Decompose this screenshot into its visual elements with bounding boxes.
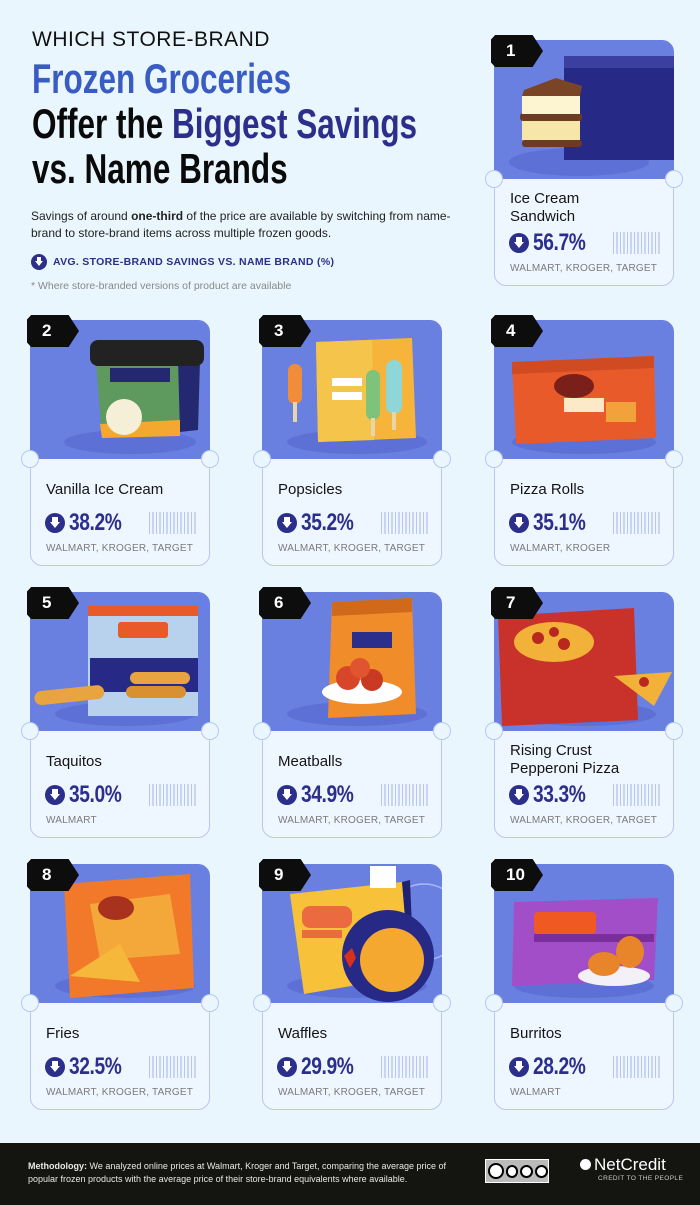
card 10: burritos: Burritos bbox=[510, 1025, 562, 1042]
title: kicker: WHICH STORE-BRAND bbox=[32, 28, 270, 51]
card 9: waffles: 29.9% bbox=[301, 1053, 353, 1080]
card 5: taquitos bbox=[30, 592, 210, 838]
card 9: waffles: WALMART, KROGER, TARGET bbox=[278, 1087, 425, 1098]
methodology text: Methodology: We analyzed online prices at Walmart, Kroger and Target, comparing the average price of popular frozen products with the average price of their store-brand equivalents where available. bbox=[28, 1161, 446, 1184]
card 2: vanilla ice cream: Vanilla Ice Cream bbox=[46, 481, 163, 498]
card 9: waffles: Waffles bbox=[278, 1025, 327, 1042]
card 8: fries: 32.5% bbox=[69, 1053, 121, 1080]
card 9: waffles bbox=[262, 864, 442, 1110]
card 6: meatballs: 34.9% bbox=[301, 781, 353, 808]
card 2: vanilla ice cream: 38.2% bbox=[69, 509, 121, 536]
card 7: rising crust pepperoni pizza: Rising Crust bbox=[510, 742, 592, 759]
card 5: taquitos: 5 bbox=[42, 593, 51, 612]
subtitle text: Savings of around one-third of the price are available by switching from name-brand to store-brand items across multiple frozen goods. bbox=[31, 209, 451, 240]
card 1: ice cream sandwich: WALMART, KROGER, TARGET bbox=[510, 263, 657, 274]
card 10: burritos: 28.2% bbox=[533, 1053, 585, 1080]
card 6: meatballs: 6 bbox=[274, 593, 283, 612]
card 8: fries bbox=[30, 864, 210, 1110]
card 3: popsicles bbox=[262, 320, 442, 566]
card 1: ice cream sandwich: Sandwich bbox=[510, 208, 575, 225]
card 3: popsicles: 35.2% bbox=[301, 509, 353, 536]
card 10: burritos: WALMART bbox=[510, 1087, 561, 1098]
title: main heading: vs. Name Brands bbox=[32, 145, 288, 192]
card 4: pizza rolls: Pizza Rolls bbox=[510, 481, 584, 498]
icon: creative commons bbox=[485, 1159, 549, 1183]
card 1: ice cream sandwich: 56.7% bbox=[533, 229, 585, 256]
card 9: waffles: 9 bbox=[274, 865, 283, 884]
logo: NetCredit bbox=[580, 1155, 683, 1182]
card 2: vanilla ice cream: WALMART, KROGER, TARGET bbox=[46, 543, 193, 554]
logo: NetCredit: NetCredit bbox=[594, 1155, 666, 1174]
card 1: ice cream sandwich: Ice Cream bbox=[510, 190, 579, 207]
title: main heading: Offer the Biggest Savings bbox=[32, 100, 417, 147]
card 6: meatballs: WALMART, KROGER, TARGET bbox=[278, 815, 425, 826]
card 1: ice cream sandwich bbox=[494, 40, 674, 286]
card 8: fries: WALMART, KROGER, TARGET bbox=[46, 1087, 193, 1098]
card 5: taquitos: 35.0% bbox=[69, 781, 121, 808]
title: main heading bbox=[32, 55, 417, 192]
card 3: popsicles: Popsicles bbox=[278, 481, 342, 498]
title block bbox=[32, 28, 417, 192]
card 4: pizza rolls: WALMART, KROGER bbox=[510, 543, 610, 554]
card 6: meatballs: Meatballs bbox=[278, 753, 342, 770]
card 6: meatballs bbox=[262, 592, 442, 838]
footnote: * Where store-branded versions of product are available bbox=[31, 280, 291, 292]
card 8: fries: 8 bbox=[42, 865, 51, 884]
card 7: rising crust pepperoni pizza: WALMART, KROGER, TARGET bbox=[510, 815, 657, 826]
card 2: vanilla ice cream: 2 bbox=[42, 321, 51, 340]
card 7: rising crust pepperoni pizza: 7 bbox=[506, 593, 515, 612]
card 4: pizza rolls: 35.1% bbox=[533, 509, 585, 536]
card 8: fries: Fries bbox=[46, 1025, 79, 1042]
card 4: pizza rolls bbox=[494, 320, 674, 566]
card 5: taquitos: WALMART bbox=[46, 815, 97, 826]
card 2: vanilla ice cream bbox=[30, 320, 210, 566]
legend bbox=[31, 254, 334, 270]
card 7: rising crust pepperoni pizza bbox=[494, 592, 674, 838]
footer bbox=[0, 1143, 700, 1205]
logo: NetCredit: CREDIT TO THE PEOPLE bbox=[598, 1175, 683, 1182]
legend: AVG. STORE-BRAND SAVINGS VS. NAME BRAND (%) bbox=[53, 256, 334, 268]
card 3: popsicles: 3 bbox=[274, 321, 283, 340]
icon: down arrow bbox=[31, 254, 47, 270]
card 7: rising crust pepperoni pizza: Pepperoni Pizza bbox=[510, 760, 619, 777]
card 10: burritos: 10 bbox=[506, 865, 525, 884]
card 3: popsicles: WALMART, KROGER, TARGET bbox=[278, 543, 425, 554]
card 10: burritos bbox=[494, 864, 674, 1110]
title: main heading: Frozen Groceries bbox=[32, 55, 291, 102]
card 1: ice cream sandwich: 1 bbox=[506, 41, 515, 60]
card 7: rising crust pepperoni pizza: 33.3% bbox=[533, 781, 585, 808]
card 4: pizza rolls: 4 bbox=[506, 321, 515, 340]
card 5: taquitos: Taquitos bbox=[46, 753, 102, 770]
